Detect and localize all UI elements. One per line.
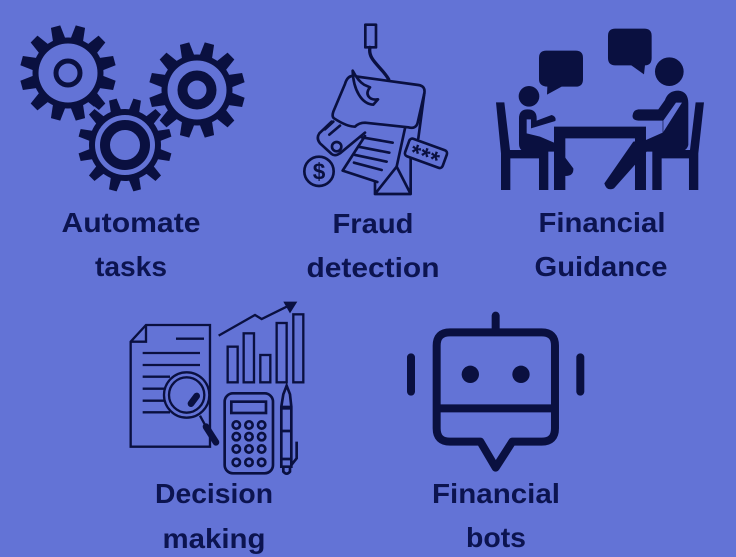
icon: phishing hook <box>304 25 448 194</box>
icon: report, chart, calculator and pen <box>131 302 303 474</box>
bar chart <box>219 302 303 382</box>
right chair <box>652 102 704 190</box>
label: automate tasks: tasks <box>95 251 167 282</box>
left chair <box>496 102 548 190</box>
dollar coin: $ <box>313 158 326 184</box>
pen <box>281 386 297 474</box>
label: financial bots: Financial <box>432 478 560 509</box>
left person <box>519 109 556 152</box>
gear: right <box>149 42 245 138</box>
label: decision making <box>155 478 273 554</box>
table <box>554 127 646 190</box>
dollar coin <box>304 157 334 186</box>
icon: chat robot <box>411 316 580 468</box>
label: financial bots: bots <box>466 522 526 553</box>
label: fraud detection: detection <box>306 252 440 283</box>
label: financial guidance: Guidance <box>534 251 668 282</box>
panel: automate tasks <box>20 25 245 282</box>
speech bubble right <box>608 29 652 74</box>
label: fraud detection: Fraud <box>332 208 414 239</box>
gear: top left <box>20 25 116 121</box>
label: decision making: making <box>162 523 266 554</box>
calculator <box>225 393 273 473</box>
document <box>131 325 210 447</box>
panel: financial guidance <box>496 29 704 282</box>
label: financial guidance <box>534 207 668 282</box>
icon: gears <box>20 25 245 194</box>
gear: bottom centre <box>76 96 174 194</box>
label: automate tasks <box>62 207 200 282</box>
label: fraud detection <box>306 208 440 283</box>
icon: two people at a table <box>496 29 704 190</box>
speech bubble left <box>539 51 583 95</box>
password tag: *** <box>406 139 443 175</box>
right person <box>604 91 688 189</box>
magnifying glass <box>164 372 216 442</box>
label: financial guidance: Financial <box>538 207 666 238</box>
panel: fraud detection <box>304 25 448 283</box>
label: decision making: Decision <box>155 478 273 509</box>
label: automate tasks: Automate <box>62 207 200 238</box>
panel: financial bots <box>411 316 580 553</box>
label: financial bots <box>432 478 560 553</box>
panel: decision making <box>131 302 303 554</box>
